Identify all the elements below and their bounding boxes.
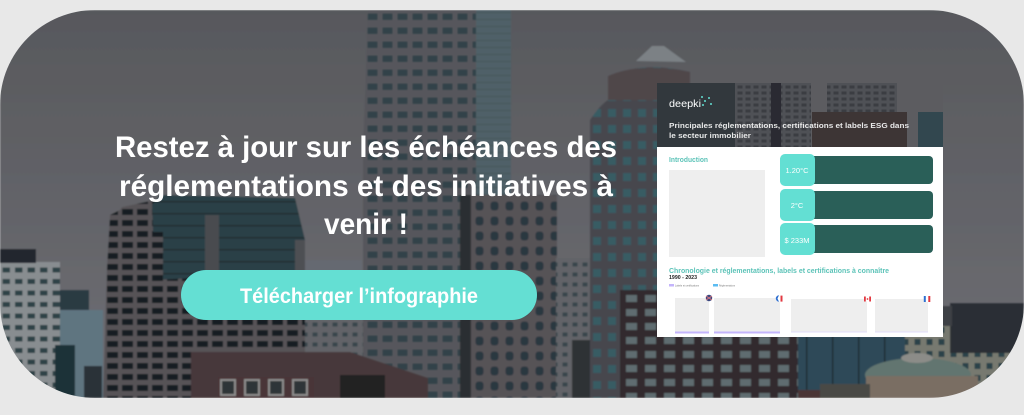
- flag: France 2: [924, 296, 930, 302]
- stat: 1.20°C: 1.20°C: [785, 166, 809, 175]
- flag: France 1: [776, 295, 782, 302]
- stat: $ 233M: [780, 223, 933, 255]
- stat: 2°C: 2°C: [791, 201, 804, 210]
- timeline card 1: [675, 298, 709, 334]
- flag: UK: [706, 295, 712, 301]
- building: narrow block: [556, 258, 592, 398]
- headline: [115, 131, 617, 241]
- timeline card 3: [791, 299, 867, 332]
- headline: Restez à jour sur les échéances des: [115, 131, 617, 164]
- building: blue curtain wall: [798, 336, 908, 398]
- building: dome: [820, 353, 978, 398]
- building: brick base: [620, 290, 800, 398]
- building: right tower: [590, 46, 690, 398]
- card title: le secteur immobilier: [669, 131, 751, 140]
- headline: venir !: [324, 208, 408, 241]
- building: central cylinder: [363, 10, 476, 398]
- stat: 1.20°C: [780, 154, 933, 186]
- building: rear wing: [304, 321, 364, 356]
- timeline dates: 1990 - 2023: [669, 275, 697, 281]
- timeline card 2: [714, 298, 780, 334]
- card intro placeholder: [669, 170, 765, 257]
- timeline heading: Chronologie et réglementations, labels et certifications à connaître: [669, 266, 889, 275]
- building: left white block: [0, 249, 60, 398]
- stat: 2°C: [780, 189, 933, 221]
- legend: [669, 284, 735, 288]
- headline: réglementations et des initiatives à: [119, 170, 613, 203]
- legend: Labels et certifications: [675, 284, 700, 288]
- building: central dark column: [460, 195, 471, 398]
- card title: Principales réglementations, certifications et labels ESG dans: [669, 121, 909, 130]
- building: central arched block: [471, 195, 557, 398]
- card header photo: [657, 83, 943, 147]
- button: download: [181, 270, 537, 320]
- building: small blue block: [55, 290, 103, 398]
- timeline card 4: [875, 299, 928, 332]
- stat: $ 233M: $ 233M: [784, 236, 810, 245]
- building: large tower: [103, 195, 305, 398]
- card title: [669, 121, 909, 140]
- infographic preview card: [657, 83, 943, 337]
- building: brick block: [191, 352, 428, 398]
- card logo: deepki: [669, 98, 701, 110]
- flag: Canada: [864, 296, 871, 302]
- card intro heading: Introduction: [669, 157, 708, 164]
- button: download: Télécharger l’infographie: [240, 285, 478, 308]
- building: central glass slab: [476, 10, 511, 196]
- legend: Réglementations: [719, 284, 735, 288]
- building: far right blocks: [904, 302, 1024, 384]
- card logo: [669, 96, 712, 110]
